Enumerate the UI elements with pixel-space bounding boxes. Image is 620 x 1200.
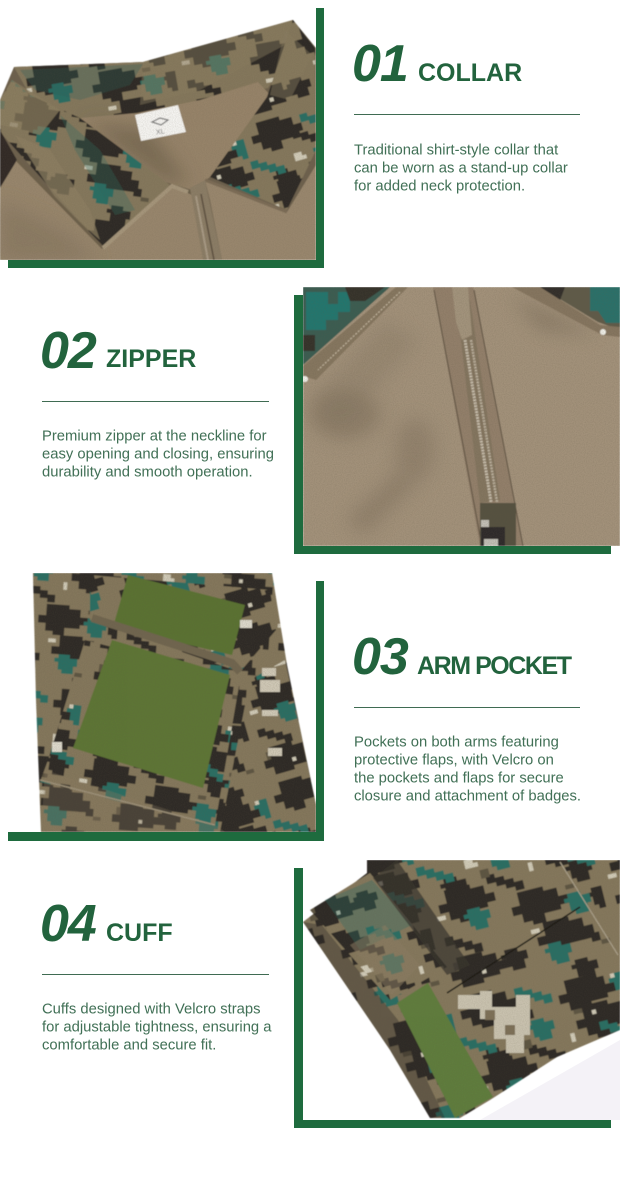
description: cuff: Cuffs designed with Velcro straps <box>42 1002 261 1018</box>
photo: collar <box>0 20 316 260</box>
description: zipper: durability and smooth operation. <box>42 464 253 480</box>
heading: 01 collar <box>352 35 522 93</box>
heading: 02 zipper <box>40 322 196 380</box>
photo: zipper <box>302 287 620 546</box>
description: cuff: comfortable and secure fit. <box>42 1038 216 1054</box>
description: collar: can be worn as a stand-up collar <box>354 160 568 176</box>
section 03: arm pocket <box>8 573 581 841</box>
photo: arm pocket <box>30 573 316 832</box>
description: collar: for added neck protection. <box>354 178 525 194</box>
heading: 01 collar: 01 <box>352 35 408 93</box>
green frame: cuff <box>294 868 611 1128</box>
description: arm pocket: closure and attachment of badges. <box>354 788 581 804</box>
description: arm pocket: protective flaps, with Velcro on <box>354 752 554 768</box>
heading: 03 arm pocket <box>352 628 572 686</box>
description: collar: Traditional shirt-style collar that <box>354 142 558 158</box>
green frame: zipper <box>294 295 611 554</box>
heading: 01 collar: COLLAR <box>418 59 522 87</box>
description: zipper: Premium zipper at the neckline for <box>42 428 267 444</box>
heading: 03 arm pocket: 03 <box>352 628 409 686</box>
description: cuff: for adjustable tightness, ensuring a <box>42 1020 272 1036</box>
icon: size label: XL <box>156 128 165 137</box>
icon: size label <box>135 105 186 141</box>
section 04: cuff <box>40 860 620 1128</box>
description: zipper: easy opening and closing, ensuring <box>42 446 274 462</box>
section 01: collar <box>0 8 580 268</box>
green frame: collar <box>8 8 324 268</box>
heading: 02 zipper: ZIPPER <box>106 345 196 373</box>
section 02: zipper <box>40 287 620 554</box>
description: arm pocket: Pockets on both arms featuring <box>354 734 559 750</box>
heading: 02 zipper: 02 <box>40 322 97 380</box>
heading: 04 cuff <box>40 895 173 953</box>
photo: cuff <box>303 860 620 1120</box>
green frame: arm pocket <box>8 581 324 841</box>
description: arm pocket: the pockets and flaps for secure <box>354 770 564 786</box>
heading: 04 cuff: CUFF <box>106 919 173 947</box>
heading: 03 arm pocket: ARM POCKET <box>417 652 572 680</box>
heading: 04 cuff: 04 <box>40 895 97 953</box>
